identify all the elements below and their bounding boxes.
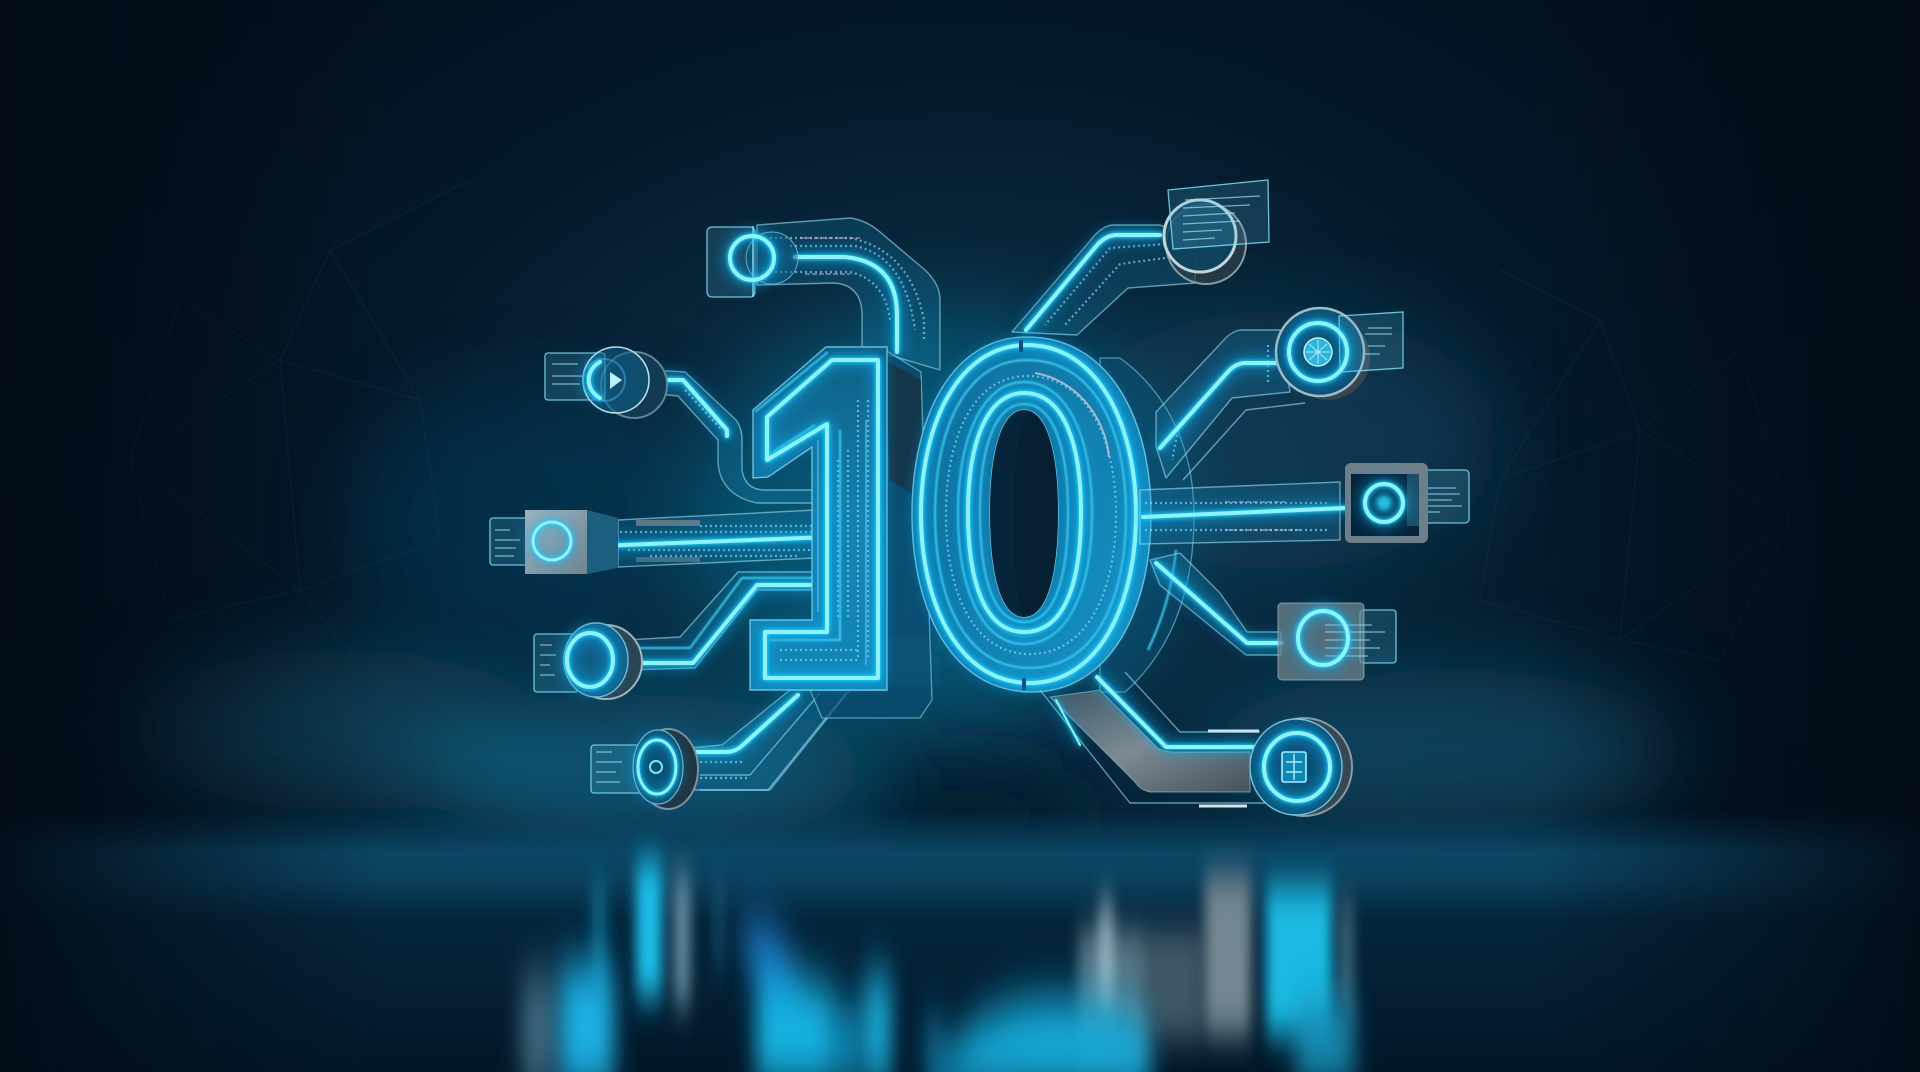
node: half ring card [1278,603,1396,680]
fog clouds [130,310,1690,870]
branch: bottom right metallic connector [1040,672,1265,806]
node: play button [545,347,667,418]
faint network lines [130,180,1790,690]
numeral 0 extrusion [1100,358,1194,692]
numeral 1 extrusion [810,350,932,718]
node: bottom left ring [591,729,698,809]
real numeral text: 10 [750,251,1150,788]
numeral 0 [750,251,1151,788]
branch: middle left connector [597,510,830,567]
branch: top left connector [757,218,940,370]
node: square ring and card [1345,463,1469,543]
branch: lower right connector [1150,553,1281,655]
node: brain ring and card [1276,308,1403,400]
floor reflections [522,862,1354,1072]
numeral 1 [750,347,887,690]
floor [0,810,1920,1072]
node: bottom right chip ring [1250,718,1352,816]
branch: bottom left connector [690,690,850,790]
branch: right connector [1140,482,1345,544]
node: cube with ring [490,510,618,574]
node: top left ring and card [707,226,798,297]
branch: upper right connector [1156,330,1305,480]
branch: lower left connector [625,572,813,670]
node: top right ring and card [1164,180,1269,284]
branch: upper left play connector [643,370,815,503]
branch: top right connector [1012,225,1195,335]
central glow [695,310,1175,730]
node: lower left ring [534,623,642,699]
